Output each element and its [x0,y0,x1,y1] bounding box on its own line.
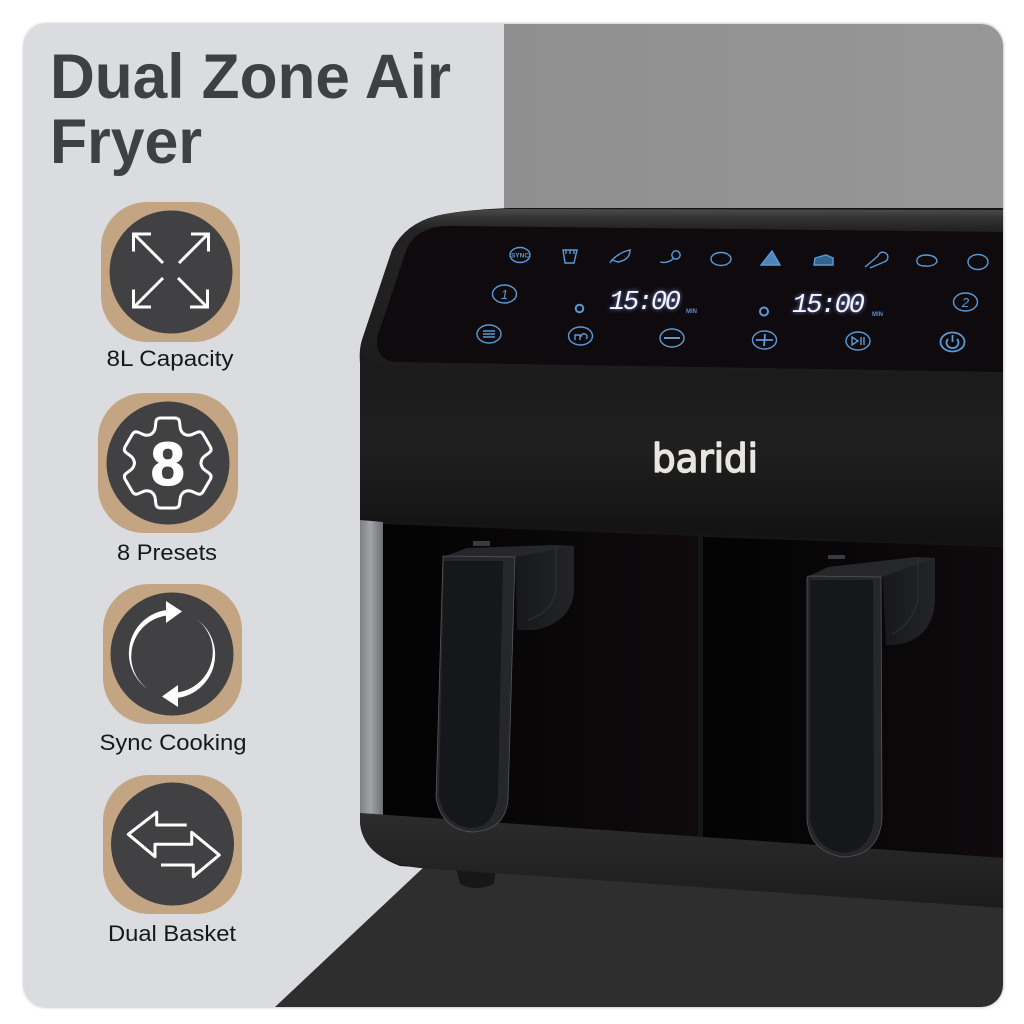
floor [275,866,1003,1007]
control panel glass [377,226,1004,372]
steel side strip [360,520,383,816]
sync button [510,248,530,262]
title: Dual Zone Air [50,42,451,112]
icon: gear with 8: 8 [151,430,185,498]
handle right [807,555,935,857]
title: Fryer [50,107,202,177]
zone one button [492,285,516,303]
zone one button: 1 [501,287,508,302]
icon: expand arrows [134,234,208,307]
min label right: MIN [872,312,883,318]
label: 8 Presets [117,540,217,565]
timer display left: 15:00 [609,288,681,318]
preset icons [563,250,988,270]
icon: opposing arrows [128,812,219,877]
title [50,42,451,177]
food button [568,327,592,345]
back wall [504,24,1003,208]
zone two button: 2 [961,295,970,310]
icon: gear with 8 [120,418,215,508]
power button [940,332,964,352]
plus button [752,331,776,349]
feature: dual basket [103,775,242,946]
foot [456,870,496,888]
touch icons [477,248,988,352]
min label left: MIN [686,309,697,315]
basket right [703,537,1004,858]
menu button [477,325,501,343]
base [360,813,1004,908]
brand logo: baridi [652,437,758,482]
body shell [360,208,1004,908]
label: 8L Capacity [106,346,234,371]
icon: circular arrows [129,601,215,707]
play pause button [846,332,870,350]
feature: sync cooking [100,584,246,755]
handle left [436,541,574,832]
sync button: SYNC [511,252,529,260]
label: Sync Cooking [100,730,246,755]
basket left [383,524,698,839]
feature: 8L capacity [101,202,240,371]
lid rim [360,209,1004,376]
minus button [660,329,684,347]
label: Dual Basket [108,921,237,946]
control band [360,409,1003,462]
timer icons [576,305,768,316]
zone two button [954,293,978,311]
timer display right: 15:00 [792,291,865,321]
feature: 8 presets [98,393,238,565]
air fryer [360,208,1004,908]
